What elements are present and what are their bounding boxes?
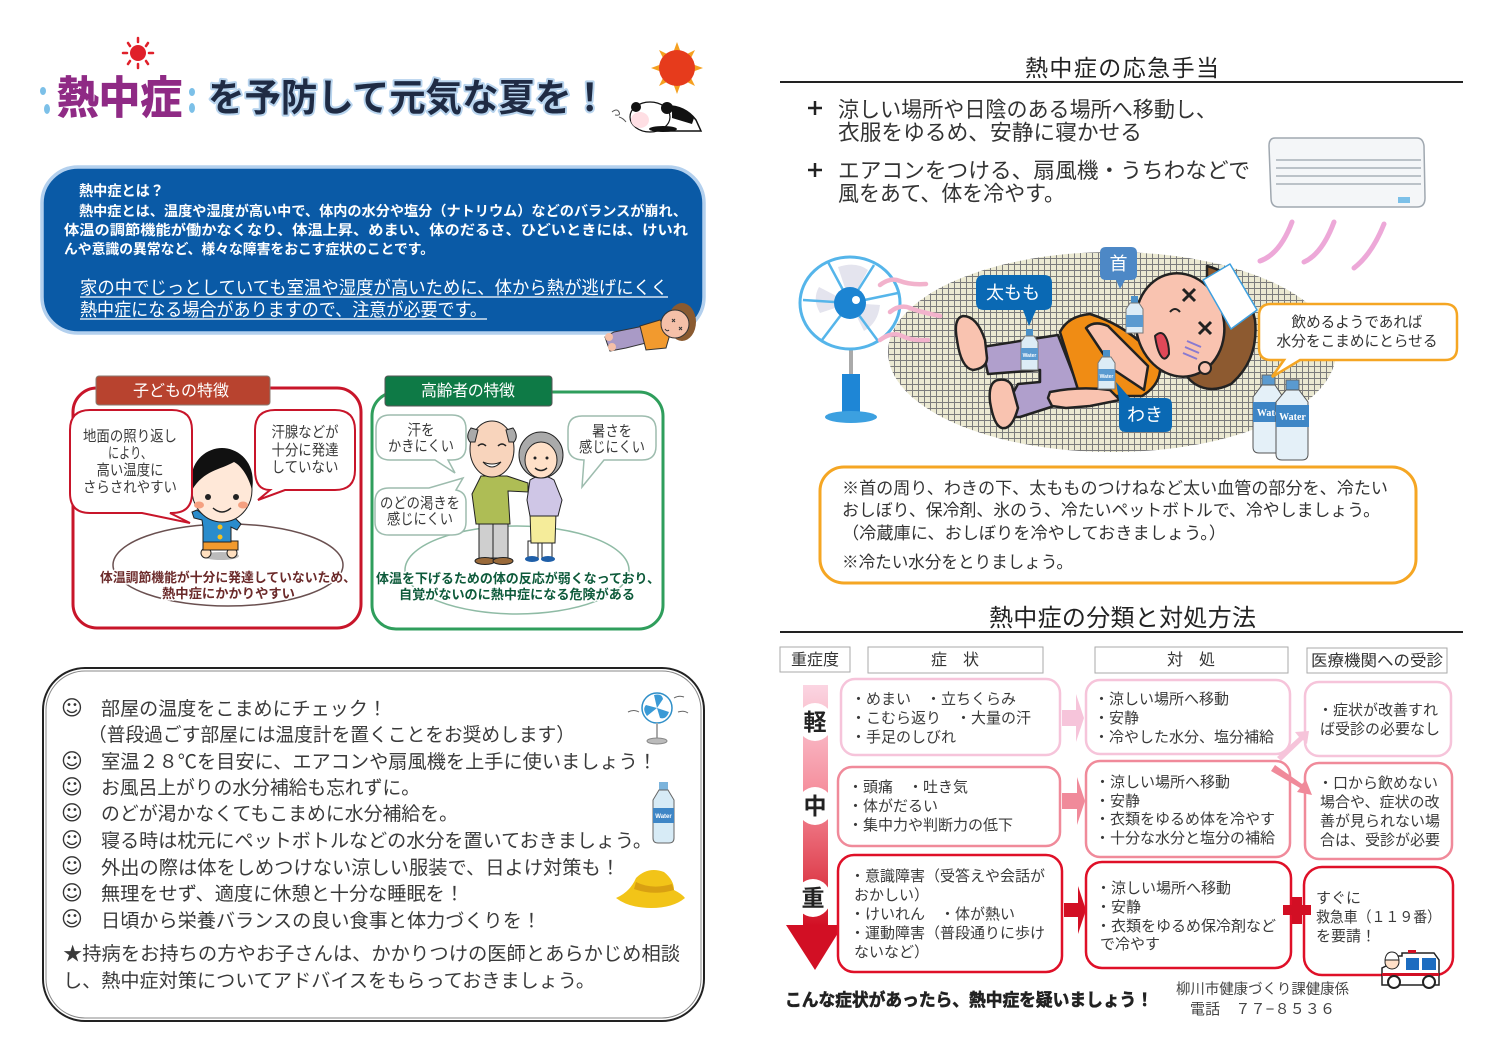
water bottles: Water — [1279, 412, 1306, 423]
panel heading — [96, 376, 270, 405]
bottle at armpit: Water — [1100, 374, 1113, 380]
children summary — [100, 570, 356, 601]
speech bubble: sweat glands: 十分に発達 — [272, 442, 338, 459]
row mild: symptoms: ・こむら返り ・大量の汗 — [851, 710, 1031, 727]
row mild: symptoms: ・手足のしびれ — [851, 729, 956, 746]
speech bubble: ground reflection — [70, 410, 192, 523]
chronic illness note: ★持病をお持ちの方やお子さんは、かかりつけの医師とあらかじめ相談 — [63, 943, 680, 965]
towel — [1203, 264, 1257, 329]
ellipse: grid background — [888, 252, 1336, 452]
elderly summary — [376, 571, 660, 602]
table header: medical visit — [1307, 648, 1447, 673]
table header: medical visit: 医療機関への受診 — [1311, 652, 1443, 670]
first aid step 1: 涼しい場所や日陰のある場所へ移動し、 — [838, 98, 1217, 122]
row mild: treatment: ・安静 — [1094, 710, 1139, 727]
speech bubble: hard to sweat — [376, 415, 466, 473]
contact info: 電話 ７７−８５３６ — [1190, 1001, 1335, 1018]
row mild: treatment: ・涼しい場所へ移動 — [1094, 691, 1229, 708]
row moderate: symptoms: ・頭痛 ・吐き気 — [848, 779, 968, 796]
mouth — [1155, 333, 1169, 359]
icon: red cross — [1283, 897, 1311, 924]
panel heading: 子どもの特徴 — [133, 382, 229, 400]
panel: cooling note — [820, 467, 1416, 583]
definition text: 熱中症とは、温度や湿度が高い中で、体内の水分や塩分（ナトリウム）などのバランスが崩れ、 — [79, 203, 687, 219]
definition text — [64, 182, 688, 257]
icon: sweat drops — [40, 87, 195, 114]
row severe: medical: すぐに — [1316, 890, 1361, 907]
table header: symptoms — [868, 647, 1043, 673]
arrow: mild — [1062, 694, 1084, 742]
first aid step 1: 衣服をゆるめ、安静に寝かせる — [838, 121, 1142, 145]
row moderate: medical: 善が見られない場 — [1320, 813, 1440, 830]
heading: classification: 熱中症の分類と対処方法 — [989, 605, 1256, 632]
first aid step 1 — [808, 98, 1217, 145]
speech bubble: hard to feel heat: 暑さを — [592, 423, 632, 440]
table header: treatment: 対 処 — [1167, 651, 1215, 669]
heading: first aid: 熱中症の応急手当 — [1025, 55, 1219, 81]
tips list: 部屋の温度をこまめにチェック！ — [101, 698, 387, 720]
severe marker — [795, 879, 831, 917]
panel heading — [385, 376, 552, 406]
row mild: medical: ば受診の必要なし — [1320, 721, 1440, 738]
water bottles: Wate — [1257, 408, 1280, 419]
speech bubble: sweat glands: していない — [272, 459, 338, 476]
row severe: symptoms: おかしい） — [854, 887, 929, 904]
nose — [1199, 362, 1211, 374]
table header: severity: 重症度 — [791, 651, 839, 669]
callout: give water: 飲めるようであれば — [1292, 314, 1422, 331]
label: armpit — [1116, 382, 1172, 432]
children summary: 熱中症にかかりやすい — [162, 586, 295, 601]
caution text: 熱中症になる場合がありますので、注意が必要です。 — [80, 300, 487, 320]
cheek marks — [1183, 341, 1201, 359]
bottle on thigh: Water — [1023, 353, 1036, 359]
panel: cooling note: （冷蔵庫に、おしぼりを冷やしておきましょう。） — [842, 524, 1226, 543]
tips list: お風呂上がりの水分補給も忘れずに。 — [101, 777, 420, 799]
smiley bullets: ☺ — [61, 854, 83, 878]
table header: symptoms: 症 状 — [931, 651, 979, 669]
speech bubble: hard to sweat: 汗を — [408, 422, 434, 439]
tips list: （普段過ごす部屋には温度計を置くことをお奨めします） — [88, 724, 575, 746]
bottle on thigh — [1021, 329, 1038, 370]
row moderate: treatment — [1086, 761, 1290, 857]
bottle at armpit — [1098, 350, 1115, 389]
panel: children — [70, 376, 361, 628]
smiley bullets: ☺ — [61, 828, 83, 852]
row moderate: treatment: ・涼しい場所へ移動 — [1095, 774, 1230, 791]
closed eye mark — [1170, 309, 1180, 312]
panel: what is heat stroke — [42, 167, 704, 333]
title keyword: 熱中症 — [57, 74, 182, 123]
row mild: medical: ・症状が改善すれ — [1318, 702, 1438, 719]
moderate marker: 中 — [804, 793, 826, 819]
severe marker: 重 — [802, 885, 824, 911]
severity arrow — [786, 685, 843, 970]
row severe: symptoms: ないなど） — [854, 944, 929, 961]
label: thigh: 太もも — [986, 283, 1040, 303]
tips list: 日頃から栄養バランスの良い食事と体力づくりを！ — [101, 910, 541, 932]
speech bubble: ground reflection: により、 — [108, 445, 152, 462]
row severe: treatment: で冷やす — [1100, 936, 1160, 953]
mild marker: 軽 — [804, 709, 826, 735]
speech bubble: sweat glands: 汗腺などが — [272, 424, 338, 441]
smiley bullets: ☺ — [61, 907, 83, 931]
tips list: 室温２８℃を目安に、エアコンや扇風機を上手に使いましょう！ — [101, 751, 657, 773]
row severe: symptoms: ・運動障害（普段通りに歩け — [850, 925, 1045, 942]
smiley bullets: ☺ — [61, 881, 83, 905]
contact info — [1176, 981, 1349, 1018]
legs — [982, 335, 1082, 417]
icon: small water bottle — [653, 782, 674, 843]
row moderate: medical: 場合や、症状の改 — [1320, 794, 1440, 811]
row moderate: medical: 合は、受診が必要 — [1320, 832, 1440, 849]
row moderate: symptoms: ・集中力や判断力の低下 — [848, 817, 1013, 834]
tips list — [88, 698, 657, 932]
tips list: のどが渇かなくてもこまめに水分補給を。 — [101, 803, 458, 825]
first aid step 2: エアコンをつける、扇風機・うちわなどで — [838, 159, 1250, 183]
row moderate: medical: ・口から飲めない — [1318, 775, 1438, 792]
smiley bullets: ☺ — [61, 801, 83, 825]
title — [40, 74, 608, 123]
torso — [1060, 314, 1160, 396]
row moderate: treatment: ・十分な水分と塩分の補給 — [1095, 830, 1275, 847]
icon: large sun — [651, 42, 703, 94]
speech bubble: sweat glands — [255, 410, 355, 500]
ellipse backdrop — [405, 526, 629, 614]
panel: cooling note: ※首の周り、わきの下、太もものつけねなど太い血管の部分を、冷たい — [842, 479, 1388, 498]
row severe: treatment: ・衣類をゆるめ保冷剤など — [1096, 918, 1276, 935]
row severe: medical — [1304, 867, 1453, 975]
arrow: severe — [1064, 886, 1086, 934]
row severe: treatment: ・安静 — [1096, 899, 1141, 916]
moderate marker — [797, 787, 833, 825]
eyes — [1183, 289, 1211, 334]
row moderate: treatment: ・衣類をゆるめ体を冷やす — [1095, 811, 1275, 828]
tips list: 無理をせず、適度に休憩と十分な睡眠を！ — [101, 883, 464, 905]
speech bubble: hard to feel thirst: のどの渇きを — [380, 495, 460, 512]
icon: cool air arrows — [1260, 222, 1384, 268]
first aid step 2 — [808, 159, 1250, 206]
head — [1126, 265, 1234, 385]
speech bubble: hard to feel thirst — [375, 478, 466, 535]
chronic illness note — [63, 943, 680, 992]
row severe: symptoms: ・けいれん ・体が熱い — [850, 906, 1015, 923]
label: neck — [1100, 247, 1137, 289]
row severe: symptoms — [838, 855, 1062, 972]
arrow: moderate — [1062, 777, 1085, 825]
row severe: treatment — [1086, 862, 1291, 968]
icon: small water bottle: Water — [655, 814, 672, 820]
callout: give water: 水分をこまめにとらせる — [1276, 333, 1438, 350]
caution text: 家の中でじっとしていても室温や湿度が高いために、体から熱が逃げにくく — [80, 278, 668, 298]
definition text: 体温の調節機能が働かなくなり、体温上昇、めまい、体のだるさ、ひどいときには、けいれ — [64, 222, 688, 238]
definition text: んや意識の異常など、様々な障害をおこす症状のことです。 — [64, 241, 434, 257]
smiley bullets: ☺ — [61, 696, 83, 720]
row severe: symptoms: ・意識障害（受答えや会話が — [850, 868, 1045, 885]
speech bubble: hard to sweat: かきにくい — [388, 438, 454, 455]
first aid step 2: 風をあて、体を冷やす。 — [838, 182, 1065, 206]
smiley bullets — [61, 696, 83, 931]
speech bubble: ground reflection: さらされやすい — [83, 479, 177, 496]
icon: breeze from fan — [880, 280, 940, 340]
panel: prevention tips — [43, 668, 704, 1021]
ellipse backdrop — [113, 524, 343, 606]
mild marker — [797, 703, 833, 741]
icon: small fan — [628, 693, 688, 744]
icon: lying person small — [605, 303, 696, 351]
panel: cooling note: おしぼり、保冷剤、氷のう、冷たいペットボトルで、冷やしましょう。 — [842, 501, 1380, 520]
upper arm — [1086, 323, 1148, 390]
lower arm — [1048, 388, 1120, 408]
chronic illness note: し、熱中症対策についてアドバイスをもらっておきましょう。 — [63, 970, 595, 992]
callout: give water — [1259, 304, 1457, 377]
speech bubble: hard to feel heat: 感じにくい — [579, 439, 645, 456]
label: neck: 首 — [1110, 254, 1128, 274]
speech bubble: ground reflection: 地面の照り返し — [83, 428, 177, 445]
footer message: こんな症状があったら、熱中症を疑いましょう！ — [785, 990, 1153, 1010]
icon: child — [191, 448, 253, 560]
row moderate: treatment: ・安静 — [1095, 793, 1140, 810]
icon: sleeping panda — [612, 102, 701, 132]
panel: elderly — [372, 376, 663, 629]
speech bubble: ground reflection: 高い温度に — [96, 462, 164, 479]
label: armpit: わき — [1127, 405, 1163, 425]
row severe: medical: を要請！ — [1316, 928, 1376, 945]
smiley bullets: ☺ — [61, 749, 83, 773]
icon: small red sun — [123, 38, 153, 68]
panel heading: 高齢者の特徴 — [421, 382, 515, 400]
speech bubble: hard to feel thirst: 感じにくい — [387, 511, 453, 528]
definition text: 熱中症とは？ — [79, 182, 164, 200]
smiley bullets: ☺ — [61, 775, 83, 799]
elderly summary: 体温を下げるための体の反応が弱くなっており、 — [376, 571, 660, 586]
icon: ambulance — [1382, 950, 1439, 988]
arrow: not improving — [1271, 765, 1312, 795]
elderly summary: 自覚がないのに熱中症になる危険がある — [399, 587, 635, 602]
caution text — [80, 278, 668, 320]
row severe: treatment: ・涼しい場所へ移動 — [1096, 880, 1231, 897]
tips list: 外出の際は体をしめつけない涼しい服装で、日よけ対策も！ — [101, 857, 620, 879]
label: thigh — [976, 275, 1052, 326]
row mild: symptoms: ・めまい ・立ちくらみ — [851, 691, 1016, 708]
row severe: medical: 救急車（１１９番） — [1316, 909, 1441, 926]
row mild: treatment: ・冷やした水分、塩分補給 — [1094, 729, 1274, 746]
bottle at neck — [1126, 296, 1143, 333]
row moderate: medical — [1305, 763, 1452, 859]
row mild: treatment — [1086, 680, 1290, 754]
title tagline: を予防して元気な夏を！ — [208, 78, 608, 120]
icon: straw hat — [616, 870, 685, 908]
icon: elderly couple — [468, 421, 563, 564]
icon: air conditioner — [1269, 138, 1425, 207]
panel: cooling note: ※冷たい水分をとりましょう。 — [842, 553, 1073, 572]
hair back — [1181, 266, 1256, 389]
icon: electric fan — [800, 257, 900, 423]
speech bubble: hard to feel heat — [568, 416, 656, 487]
illustration: person lying down — [956, 264, 1257, 428]
water bottles — [1253, 375, 1309, 460]
row mild: symptoms — [841, 679, 1060, 755]
row moderate: symptoms: ・体がだるい — [848, 798, 938, 815]
table header: treatment — [1095, 647, 1288, 673]
tips list: 寝る時は枕元にペットボトルなどの水分を置いておきましょう。 — [101, 830, 652, 852]
arrow: improves — [1277, 731, 1309, 761]
row mild: medical — [1305, 682, 1451, 756]
row moderate: symptoms — [838, 767, 1060, 846]
contact info: 柳川市健康づくり課健康係 — [1176, 981, 1349, 998]
children summary: 体温調節機能が十分に発達していないため、 — [100, 570, 356, 585]
table header: severity — [780, 647, 850, 672]
